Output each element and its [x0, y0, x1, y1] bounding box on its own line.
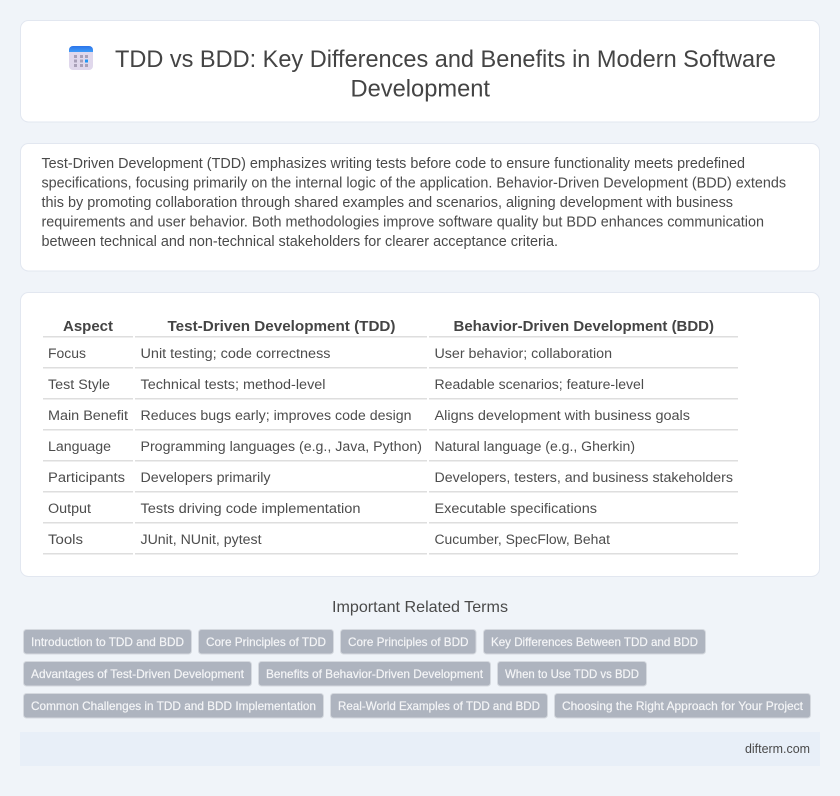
- row: test style: [48, 377, 644, 393]
- table header: [63, 318, 714, 335]
- tag: [24, 662, 252, 686]
- text block: intro paragraph: specifications, focusing primarily on the internal logic of the application. Behavior-Driven Development (BDD) extends: [42, 176, 786, 192]
- table header: Behavior-Driven Development (BDD): [454, 318, 714, 335]
- panel: title card: [20, 20, 820, 122]
- row: main benefit: [48, 408, 690, 424]
- tag: Real-World Examples of TDD and BDD: [338, 699, 540, 713]
- tag: [554, 694, 810, 718]
- row: focus: Unit testing; code correctness: [140, 346, 330, 362]
- icon: calendar: [69, 46, 93, 70]
- tag: Key Differences Between TDD and BDD: [491, 635, 698, 649]
- panel: introduction: [20, 144, 820, 271]
- table header: Aspect: [63, 318, 113, 335]
- title: Development: [350, 76, 490, 102]
- tag: Core Principles of BDD: [348, 635, 469, 649]
- row: focus: User behavior; collaboration: [434, 346, 612, 362]
- row: test style: Readable scenarios; feature-level: [434, 377, 644, 393]
- tag: [24, 694, 324, 718]
- row: language: [48, 439, 635, 455]
- row: participants: Developers, testers, and business stakeholders: [434, 470, 733, 486]
- title: TDD vs BDD: Key Differences and Benefits in Modern Software: [115, 46, 776, 73]
- row: test style: Test Style: [48, 377, 110, 393]
- tag: Common Challenges in TDD and BDD Implementation: [31, 699, 316, 713]
- row: output: [48, 501, 597, 517]
- panel: comparison table: [20, 292, 820, 576]
- row: main benefit: Main Benefit: [48, 408, 128, 424]
- text block: intro paragraph: requirements and user behavior. Both methodologies improve software quality but BDD enhances communication: [42, 214, 764, 230]
- row: participants: [48, 470, 733, 486]
- row: test style: Technical tests; method-level: [140, 377, 326, 393]
- text block: intro paragraph: between technical and non-technical stakeholders for clearer acceptance criteria.: [42, 234, 558, 250]
- panel: footer: [20, 732, 820, 766]
- panel: related term tags: [24, 630, 810, 718]
- row: participants: Participants: [48, 470, 125, 486]
- table header: Test-Driven Development (TDD): [168, 318, 396, 335]
- row: language: Language: [48, 439, 111, 455]
- row: language: Natural language (e.g., Gherkin): [434, 439, 635, 455]
- row: output: Tests driving code implementation: [140, 501, 360, 517]
- row: tools: JUnit, NUnit, pytest: [140, 532, 262, 548]
- tag: When to Use TDD vs BDD: [505, 667, 639, 681]
- title: [115, 46, 776, 102]
- tag: Introduction to TDD and BDD: [31, 635, 184, 649]
- tag: Benefits of Behavior-Driven Development: [266, 667, 484, 681]
- text block: intro paragraph: [42, 156, 786, 250]
- tag: [330, 694, 548, 718]
- tag: [340, 630, 476, 654]
- tag: [484, 630, 706, 654]
- tag: Choosing the Right Approach for Your Project: [562, 699, 804, 713]
- tag: [198, 630, 334, 654]
- text block: intro paragraph: this by promoting collaboration through shared examples and scenarios, aligning development with business: [42, 195, 733, 211]
- row: language: Programming languages (e.g., Java, Python): [140, 439, 422, 455]
- row: participants: Developers primarily: [140, 470, 271, 486]
- row: main benefit: Aligns development with business goals: [434, 408, 690, 424]
- tag: Advantages of Test-Driven Development: [31, 667, 245, 681]
- row: focus: Focus: [48, 346, 86, 362]
- tag: [24, 630, 192, 654]
- row: output: Executable specifications: [434, 501, 597, 517]
- row: focus: [48, 346, 612, 362]
- row: tools: Cucumber, SpecFlow, Behat: [434, 532, 610, 548]
- tag: [258, 662, 490, 686]
- footer brand: difterm.com: [745, 742, 810, 756]
- row: main benefit: Reduces bugs early; improves code design: [140, 408, 412, 424]
- tag: [498, 662, 646, 686]
- row: output: Output: [48, 501, 91, 517]
- row: tools: Tools: [48, 532, 83, 548]
- text block: intro paragraph: Test-Driven Development (TDD) emphasizes writing tests before code to ensure functionality meets predefined: [42, 156, 745, 172]
- row: tools: [48, 532, 610, 548]
- tag: Core Principles of TDD: [206, 635, 326, 649]
- heading: important related terms: Important Related Terms: [332, 599, 508, 616]
